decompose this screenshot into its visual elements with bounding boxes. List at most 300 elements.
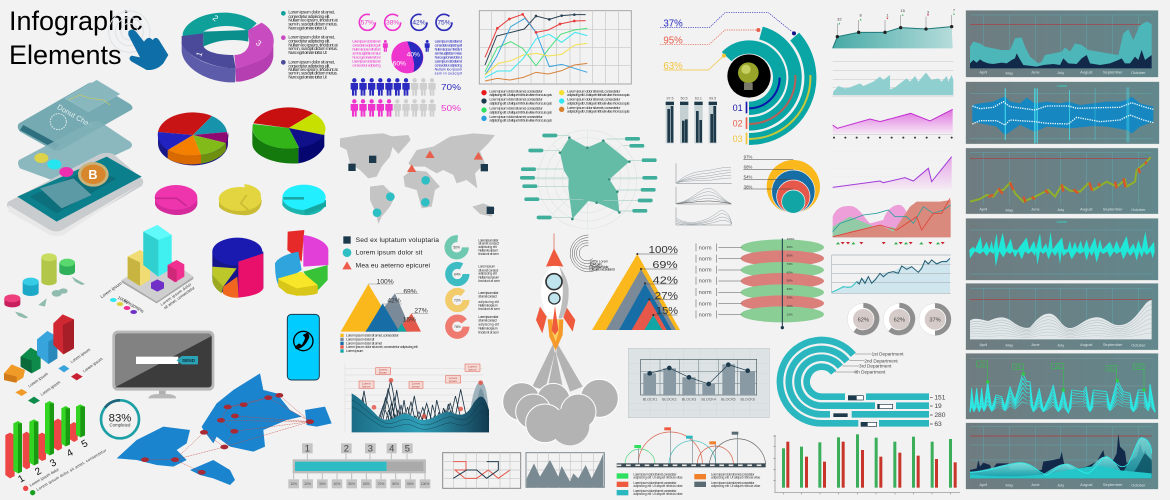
gender pie with people: sem in suscipit dictum metus bbox=[352, 52, 381, 56]
mountain contour chart bbox=[345, 363, 489, 432]
step progress bar: 70% bbox=[378, 482, 384, 486]
layered triangle chart with percentages: 69% bbox=[652, 260, 678, 271]
percent callouts: 95% bbox=[663, 35, 683, 46]
dark panel 1: area and volume chart: May bbox=[1006, 70, 1013, 75]
dark panel 1: area and volume chart: August bbox=[1080, 70, 1093, 75]
donut captions: Lorem ipsum dolor bbox=[478, 315, 499, 319]
arc timeline diagram bbox=[617, 427, 766, 496]
dark panel 4: spike signal chart: Lorem bbox=[1056, 220, 1067, 224]
percent callouts: 63% bbox=[663, 61, 683, 72]
3D pie chart: four slices bbox=[252, 107, 325, 164]
department arc and bar chart: 2nd Department bbox=[864, 358, 898, 363]
small framed line chart bbox=[443, 453, 521, 488]
mountain chart callouts bbox=[359, 364, 480, 388]
line chart legend: Lorem ipsum dolor sit amet, consectetur bbox=[489, 88, 543, 93]
multi layer area chart bbox=[833, 198, 951, 244]
gray ring gauges bbox=[847, 303, 951, 335]
dark panel 1: area and volume chart: April bbox=[979, 70, 987, 75]
3D donut chart bbox=[182, 13, 274, 82]
concentric half circles with text: 100% Lorem bbox=[589, 262, 602, 266]
donut legend text: Nunc eget ornare tortor. Ut bbox=[288, 25, 327, 30]
dark panel 6: cyan wave lines chart: 321 bbox=[1109, 367, 1114, 371]
dark panel 3: candlestick chart: August bbox=[1080, 207, 1093, 212]
search box: SEND bbox=[182, 358, 196, 363]
donut legend text: consectetur adipiscing elit. bbox=[288, 63, 330, 68]
line chart legend: Lorem ipsum dolor sit amet, consectetur bbox=[567, 105, 621, 110]
step progress bar: 60% bbox=[363, 482, 370, 486]
small striped donuts with text: 78% bbox=[454, 325, 461, 329]
dark panel 5: white ribbon wave chart: April bbox=[979, 342, 987, 347]
line chart legend: adipiscing elit. Ut aliquet nibbula vitae rhoncus quis bbox=[489, 92, 552, 97]
line chart legend: Lorem ipsum dolor sit amet, consectetur bbox=[489, 114, 543, 119]
3D donut chart: 1 bbox=[194, 50, 205, 58]
donut captions: adipiscing elit bbox=[478, 300, 499, 304]
dark panel 6: cyan wave lines chart bbox=[966, 353, 1158, 419]
layered triangle chart: 100% bbox=[377, 279, 394, 286]
isometric blue world map with network bbox=[117, 373, 332, 485]
step progress bar: 80% bbox=[392, 482, 399, 486]
area chart with pins: 32 bbox=[837, 17, 842, 22]
line chart legend: adipiscing elit. Ut aliquet nibbula vitae rhoncus quis bbox=[489, 109, 552, 114]
stacked ellipses chart with norm labels: 100% bbox=[787, 237, 795, 241]
donut legend text: Lorem ipsum dolor sit amet, bbox=[288, 35, 335, 40]
title: Elements bbox=[9, 40, 122, 70]
dark panel 5: white ribbon wave chart: October bbox=[1131, 342, 1146, 347]
norm labels bbox=[699, 245, 712, 318]
axis numbers: 3 bbox=[48, 457, 59, 470]
line chart legend bbox=[481, 88, 630, 123]
cylinder chart small icons bbox=[15, 277, 85, 318]
axis numbers: 5 bbox=[80, 438, 90, 450]
stacked ellipses chart with norm labels: 90% bbox=[787, 245, 793, 249]
donut captions: tincidunt at sem bbox=[478, 252, 499, 256]
area chart with pins: 1 bbox=[886, 13, 889, 18]
line chart legend: adipiscing elit. Ut aliquet nibbula vitae rhoncus quis bbox=[567, 109, 630, 114]
dark panel 5: white ribbon wave chart: May bbox=[1006, 343, 1013, 348]
donut captions: sit amet consect bbox=[478, 294, 497, 298]
gender pie with people: sem in suscipit dictum metus bbox=[435, 52, 462, 56]
arc diagram legend: Lorem ipsum dolor sit amet, consectetur bbox=[633, 481, 678, 485]
arc chart index numbers: 01 bbox=[733, 103, 743, 113]
gauges: percent rings: 75% bbox=[437, 20, 451, 27]
dark panel 1: area and volume chart: June bbox=[1031, 70, 1040, 75]
donut legend text: Lorem ipsum dolor sit amet, bbox=[288, 59, 335, 64]
donut captions: Lorem ipsum bbox=[478, 265, 495, 269]
dark panel 7: skyline wave chart bbox=[966, 423, 1158, 489]
icon: lightbulb bbox=[727, 54, 771, 98]
percent callouts bbox=[660, 13, 796, 72]
dark panel 6: cyan wave lines chart: 123 bbox=[1136, 365, 1142, 369]
mountain contour chart: ipsum bbox=[449, 379, 457, 383]
mountain contour chart: Lorem bbox=[412, 382, 421, 386]
small pink pie bbox=[155, 185, 197, 215]
dark panel 7: skyline wave chart: August bbox=[1080, 482, 1093, 487]
donut legend text: sem in, suscipit dictum metus. bbox=[288, 71, 338, 76]
layered triangle chart: 15% bbox=[403, 317, 416, 324]
axis numbers: 1 bbox=[16, 473, 27, 485]
gauges: percent rings: 57% bbox=[361, 20, 374, 27]
small yellow pie bbox=[219, 184, 262, 215]
department arc and bar chart: 1st Department bbox=[872, 352, 904, 357]
step progress bar: 10% bbox=[290, 482, 297, 486]
small striped donuts with text: 72% bbox=[454, 298, 461, 302]
donut captions: adipiscing elit bbox=[478, 245, 497, 249]
dark panel 3: candlestick chart: April bbox=[979, 207, 987, 212]
gender pie with people: Nullam leo ipsum tincidunt bbox=[352, 48, 381, 52]
donut captions: tincidunt at sem bbox=[478, 279, 500, 283]
shape legend: Mea eu aeterno epicurei bbox=[356, 262, 431, 269]
block bar and line chart: BLOCK2 bbox=[662, 398, 677, 402]
dark panel 3: candlestick chart: May bbox=[1006, 207, 1013, 212]
arc diagram legend: adipiscing elit. Ut aliquet nibbula vitae bbox=[633, 484, 683, 488]
dark panel 1: area and volume chart: September bbox=[1103, 70, 1123, 75]
donut legend text: sem in, suscipit dictum metus. bbox=[288, 46, 338, 51]
block bar and line chart: BLOCK4 bbox=[701, 398, 716, 402]
arc diagram legend: Lorem ipsum dolor sit amet, consectetur bbox=[633, 473, 678, 477]
stacked ellipses chart with norm labels: 80% bbox=[787, 253, 793, 257]
axis numbers: 4 bbox=[65, 447, 76, 460]
line chart legend: Lorem ipsum dolor sit amet, consectetur bbox=[567, 97, 621, 102]
3D bars legend: Lorem ipsum bbox=[39, 379, 62, 397]
axis numbers bbox=[16, 438, 90, 485]
exploded pie chart: navy and pink bbox=[212, 238, 263, 298]
dark panel 5: white ribbon wave chart: July bbox=[1057, 342, 1064, 347]
norm labels: norm bbox=[699, 279, 712, 285]
concentric circles chart: 54% bbox=[744, 175, 752, 180]
gender pie with people: Nunc eget ornare tortor ut bbox=[352, 56, 381, 60]
step progress bar: 90% bbox=[407, 482, 414, 486]
dark panel 4: spike signal chart bbox=[966, 218, 1158, 280]
layered triangle chart with percentages: 15% bbox=[656, 306, 678, 317]
concentric half circles with text: Lorem ipsum dolor sit amet bbox=[589, 268, 615, 272]
world map with markers bbox=[340, 133, 495, 224]
isometric bar chart on platform bbox=[99, 225, 196, 314]
gauges: percent rings: 38% bbox=[386, 20, 399, 27]
donut captions: sit amet consect bbox=[478, 319, 497, 323]
rocket with smoke bbox=[503, 233, 618, 445]
dark panel 1: area and volume chart bbox=[966, 10, 1158, 77]
mobile phone icon bbox=[287, 314, 319, 380]
dark panel 3: candlestick chart: September bbox=[1103, 207, 1123, 212]
norm labels: norm bbox=[699, 268, 712, 274]
gender pie with people: 40% bbox=[407, 52, 420, 59]
concentric half circles with text: Lorem ipsum dolor bbox=[589, 265, 610, 269]
stacked ellipses chart with norm labels: 70% bbox=[787, 262, 793, 266]
cylinder chart bbox=[4, 253, 85, 318]
arc diagram legend bbox=[617, 473, 760, 496]
3D pie chart: six slices bbox=[158, 112, 228, 165]
bar chart legend: Lorem ipsum bbox=[99, 280, 123, 299]
dark panel 6: cyan wave lines chart: 123 bbox=[979, 362, 985, 366]
area chart with pins: 3 bbox=[927, 9, 930, 14]
stacked ellipses chart with norm labels: 20% bbox=[787, 304, 793, 308]
gauges: percent rings bbox=[359, 14, 452, 30]
donut legend text: consectetur adipiscing elit. bbox=[288, 14, 330, 19]
mountain contour chart: ipsum bbox=[412, 385, 420, 389]
step progress bar bbox=[288, 443, 430, 488]
3D donut chart: 2 bbox=[211, 13, 220, 23]
dark panel 7: skyline wave chart: September bbox=[1103, 482, 1123, 487]
line chart legend: adipiscing elit. Ut aliquet nibbula vitae rhoncus quis bbox=[489, 100, 552, 105]
gray ring gauges: 62% bbox=[894, 317, 905, 323]
department arc and bar chart: 151 bbox=[934, 394, 946, 401]
donut legend text: Lorem ipsum dolor sit amet, bbox=[288, 10, 335, 15]
gender pie with people: consectetur adipiscing elit bbox=[352, 44, 381, 48]
lightbulb arc chart bbox=[660, 13, 810, 144]
norm labels: norm bbox=[699, 245, 712, 251]
donut captions: sit amet consect bbox=[478, 242, 499, 246]
isometric smartphone with layers bbox=[7, 80, 144, 236]
gender pie with people: consectetur adipiscing elit bbox=[435, 44, 462, 48]
gender pie with people bbox=[352, 40, 462, 76]
dark panel 5: white ribbon wave chart bbox=[966, 283, 1158, 350]
arc diagram legend: adipiscing elit. Ut aliquet nibbula vitae bbox=[711, 484, 760, 488]
3D bars legend: Lorem ipsum bbox=[27, 371, 49, 388]
line chart legend: adipiscing elit. Ut aliquet nibbula vitae rhoncus quis bbox=[567, 92, 630, 97]
shape legend: Lorem ipsum dolor sit bbox=[356, 250, 422, 257]
area chart with pins: 15 bbox=[900, 8, 906, 13]
line chart legend: Lorem ipsum dolor sit amet, consectetur bbox=[489, 106, 543, 111]
donut captions: tincidunt at sem bbox=[478, 307, 500, 311]
dark panel 5: white ribbon wave chart: June bbox=[1031, 342, 1040, 347]
gender pie with people: consectetur adipiscing bbox=[435, 64, 462, 68]
layered triangle chart: 42% bbox=[387, 298, 401, 305]
triangle chart legend: Lorem ipsum dolor sit amet bbox=[346, 341, 382, 345]
mountain contour chart: Lorem bbox=[449, 376, 458, 380]
step progress bar: 50% bbox=[348, 482, 355, 486]
step progress bar: 5 bbox=[405, 444, 410, 454]
concentric circles chart bbox=[743, 155, 820, 213]
icon: hand pointer with ripples bbox=[109, 11, 168, 70]
dark panel 2: waveform chart: Lorem bbox=[1057, 84, 1067, 88]
donut legend text: sem in, suscipit dictum metus. bbox=[288, 21, 338, 26]
block bar and line chart: BLOCK3 bbox=[682, 398, 696, 402]
layered triangle chart with percentages: 100% bbox=[649, 245, 678, 256]
arc diagram legend: Lorem ipsum dolor sit amet, consectetur bbox=[711, 473, 755, 477]
bar chart legend: sit amet, consectetur bbox=[163, 285, 196, 310]
donut legend text: Nullam leo ipsum, tincidunt at bbox=[288, 18, 338, 23]
department arc and bar chart: 3rd Department bbox=[859, 364, 892, 369]
block bar and line chart: BLOCK1 bbox=[643, 398, 657, 402]
3D bars legend: Lorem ipsum bbox=[82, 356, 104, 373]
triangle chart legend: Lorem ipsum dolor sit amet, consectetur adipiscing elit bbox=[346, 345, 418, 349]
arc diagram legend: adipiscing elit. Ut aliquet nibbula vitae bbox=[711, 476, 760, 480]
concentric circles chart: 68% bbox=[744, 165, 752, 170]
stacked ellipses chart with norm labels: 10% bbox=[787, 313, 793, 317]
norm labels: norm bbox=[699, 290, 712, 296]
gray ring gauges: 37% bbox=[929, 317, 941, 323]
small column gauges: 97.5 bbox=[666, 96, 674, 100]
title bbox=[9, 6, 143, 70]
step progress bar: 20% bbox=[304, 482, 311, 486]
layered triangle chart: 69% bbox=[403, 288, 417, 295]
stacked ellipses chart with norm labels: 60% bbox=[787, 270, 793, 274]
dark panel 3: candlestick chart: June bbox=[1031, 207, 1040, 212]
dark panel 7: skyline wave chart: May bbox=[1006, 483, 1013, 488]
dark panel 6: cyan wave lines chart: 123 bbox=[1055, 364, 1060, 368]
triangle chart legend bbox=[340, 333, 418, 353]
arc chart index numbers bbox=[733, 102, 747, 144]
dark panel 7: skyline wave chart: October bbox=[1131, 482, 1146, 487]
norm labels: norm bbox=[699, 312, 712, 318]
gender pie with people: consectetur adipiscing bbox=[352, 64, 381, 68]
violet line area chart bbox=[833, 152, 952, 189]
small column gauges: 63.1 bbox=[695, 96, 702, 100]
block bar and line chart bbox=[628, 348, 769, 418]
mountain contour chart: ipsum bbox=[362, 384, 371, 388]
column chart legend: Lorem ipsum dolor bbox=[29, 466, 60, 488]
3D green and red column chart bbox=[5, 401, 108, 495]
area chart with pins: 8 bbox=[860, 13, 863, 18]
line chart legend: adipiscing elit. Ut aliquet nibbula vitae rhoncus quis bbox=[489, 118, 552, 123]
donut legend text: consectetur adipiscing elit. bbox=[288, 39, 330, 44]
shape legend: Sed ex luptatum voluptaria bbox=[356, 237, 439, 244]
department arc and bar chart: 19 bbox=[934, 403, 942, 410]
3D donut chart: 3 bbox=[254, 38, 264, 48]
triangle chart legend: Lorem ipsum dolor sit amet, consectetur bbox=[346, 333, 399, 337]
triangle chart legend: Lorem ipsum bbox=[346, 349, 363, 353]
percent callouts: 37% bbox=[663, 19, 683, 30]
stacked ellipses chart with norm labels: 50% bbox=[787, 279, 793, 283]
bar chart legend: 100% bbox=[117, 295, 129, 305]
triangle chart legend: Lorem ipsum dolor sit bbox=[346, 337, 374, 341]
dark panel 3: candlestick chart: July bbox=[1057, 207, 1064, 212]
blue trend line area chart bbox=[832, 255, 951, 293]
donut legend text: Nunc eget ornare tortor. Ut bbox=[288, 75, 327, 80]
gender pie with people: Nullam leo ipsum tincidunt bbox=[435, 48, 462, 52]
83% completed ring: 83% bbox=[109, 412, 131, 424]
step progress bar: 40% bbox=[334, 482, 340, 486]
department arc and bar chart bbox=[780, 340, 946, 428]
donut captions: Lorem ipsum dolor bbox=[478, 238, 499, 242]
isometric 3D bars with legend bbox=[4, 314, 104, 404]
people pictogram 70% bbox=[351, 78, 461, 96]
donut legend text: Nullam leo ipsum, tincidunt at bbox=[288, 67, 338, 72]
jagged teal area chart bbox=[833, 62, 953, 97]
mountain contour chart: Lorem bbox=[362, 381, 371, 385]
radar chart bbox=[520, 130, 657, 229]
83% completed ring: Completed bbox=[110, 423, 131, 428]
rocket body bbox=[536, 233, 575, 351]
dark panel 3: candlestick chart: October bbox=[1131, 207, 1146, 212]
step progress bar: 100% bbox=[421, 482, 429, 486]
donut captions: Nullam leo ipsum bbox=[478, 275, 499, 279]
bar chart legend: 60% bbox=[123, 298, 133, 307]
smoke trails and clouds bbox=[503, 343, 618, 445]
small cyan pie bbox=[282, 185, 326, 215]
gender pie with people: Nunc eget ornare tortor ut bbox=[435, 56, 462, 60]
people pictogram 50% bbox=[351, 99, 461, 117]
multi line chart bbox=[479, 11, 631, 84]
bar chart legend bbox=[99, 280, 196, 314]
arc chart index numbers: 02 bbox=[733, 119, 743, 129]
small column gauges bbox=[666, 96, 717, 143]
dark panel 7: skyline wave chart: June bbox=[1031, 482, 1040, 487]
mountain contour chart: Lorem bbox=[379, 368, 388, 372]
step progress bar: 3 bbox=[368, 444, 373, 454]
donut captions bbox=[478, 238, 500, 334]
layered triangle chart with percentages: 42% bbox=[653, 276, 678, 287]
stacked contour line charts bbox=[676, 163, 732, 225]
step progress bar: 4 bbox=[389, 444, 394, 454]
concentric circles chart: 38% bbox=[744, 184, 752, 189]
stacked ellipses chart with norm labels: 30% bbox=[787, 295, 793, 299]
mountain contour chart: ipsum bbox=[379, 371, 387, 375]
bar chart legend: 30% bbox=[130, 303, 140, 311]
green and red grouped bar chart bbox=[773, 434, 960, 494]
gender pie with people: Lorem ipsum dolor sit amet bbox=[435, 40, 462, 44]
shape legend bbox=[342, 236, 439, 269]
step progress bar: 2 bbox=[344, 444, 349, 454]
dark panel 7: skyline wave chart: July bbox=[1057, 482, 1064, 487]
dark panel 1: area and volume chart: July bbox=[1057, 70, 1064, 75]
gender pie with people: Lorem ipsum dolor sit amet bbox=[352, 60, 381, 64]
area chart with pins: 7 bbox=[953, 7, 956, 12]
line chart legend: Lorem ipsum dolor sit amet, consectetur bbox=[567, 88, 621, 93]
step progress bar: 1 bbox=[305, 444, 310, 454]
donut captions: Nullam leo ipsum bbox=[478, 248, 499, 252]
small striped donuts with text: 50% bbox=[453, 246, 460, 250]
small striped donuts with text bbox=[448, 238, 500, 335]
layered triangle chart with percentages: 27% bbox=[655, 291, 678, 302]
gauges: percent rings: 42% bbox=[412, 20, 426, 27]
dark panel 6: cyan wave lines chart: 231 bbox=[1015, 365, 1021, 369]
layered triangle chart: 27% bbox=[414, 308, 428, 315]
layered triangle chart with percentages bbox=[592, 245, 680, 330]
donut captions: Nullam leo ipsum bbox=[478, 303, 498, 307]
donut captions: adipiscing elit bbox=[478, 322, 499, 326]
isometric smartphone with layers: Donut Chart bbox=[56, 102, 94, 130]
layered triangle chart bbox=[340, 279, 428, 353]
gender pie with people: Nullam leo ipsum bbox=[435, 68, 462, 72]
step progress bar: 30% bbox=[319, 482, 326, 486]
dark panel 2: waveform chart bbox=[966, 82, 1159, 144]
gender pie with people: Lorem ipsum dolor sit amet bbox=[352, 40, 381, 44]
small framed mountain chart bbox=[526, 453, 604, 487]
area chart with pins bbox=[833, 7, 956, 48]
department arc and bar chart: 280 bbox=[934, 412, 946, 419]
dark panel 1: area and volume chart: October bbox=[1131, 70, 1146, 75]
small column gauges: 50.5 bbox=[680, 96, 688, 100]
isometric smartphone with layers: B bbox=[88, 168, 97, 182]
magenta area chart with timeline bbox=[833, 109, 953, 139]
norm labels: norm bbox=[699, 257, 712, 263]
arc chart index numbers: 03 bbox=[733, 134, 743, 144]
line chart legend: Lorem ipsum dolor sit amet, consectetur bbox=[489, 97, 543, 102]
concentric half circles with text bbox=[570, 235, 615, 272]
83% completed ring bbox=[101, 400, 139, 438]
mountain contour chart: ipsum bbox=[468, 367, 477, 371]
stacked ellipses chart with norm labels bbox=[696, 237, 824, 329]
donut legend text bbox=[281, 10, 338, 80]
donut captions: Nullam leo ipsum bbox=[478, 326, 498, 330]
donut captions: Lorem ipsum dolor bbox=[478, 291, 499, 295]
small column gauges: 99.5 bbox=[709, 96, 716, 100]
concentric circles chart: 97% bbox=[744, 155, 752, 160]
norm labels: norm bbox=[699, 301, 712, 307]
map markers bbox=[348, 150, 494, 217]
3D bars legend: Lorem ipsum bbox=[69, 346, 92, 364]
donut captions: tincidunt at sem bbox=[478, 330, 499, 334]
department mini gauges bbox=[833, 396, 893, 426]
donut captions: adipiscing elit bbox=[478, 272, 497, 276]
column chart legend: Lorem ipsum dolor sit amet, consectetur bbox=[35, 447, 108, 492]
donut legend text: Nullam leo ipsum, tincidunt at bbox=[288, 42, 338, 47]
people pictogram 50%: 50% bbox=[441, 103, 461, 113]
donut legend text: Nunc eget ornare tortor. Ut bbox=[288, 50, 327, 55]
block bar and line chart: BLOCK5 bbox=[721, 398, 736, 402]
dark panel 7: skyline wave chart: April bbox=[979, 482, 987, 487]
